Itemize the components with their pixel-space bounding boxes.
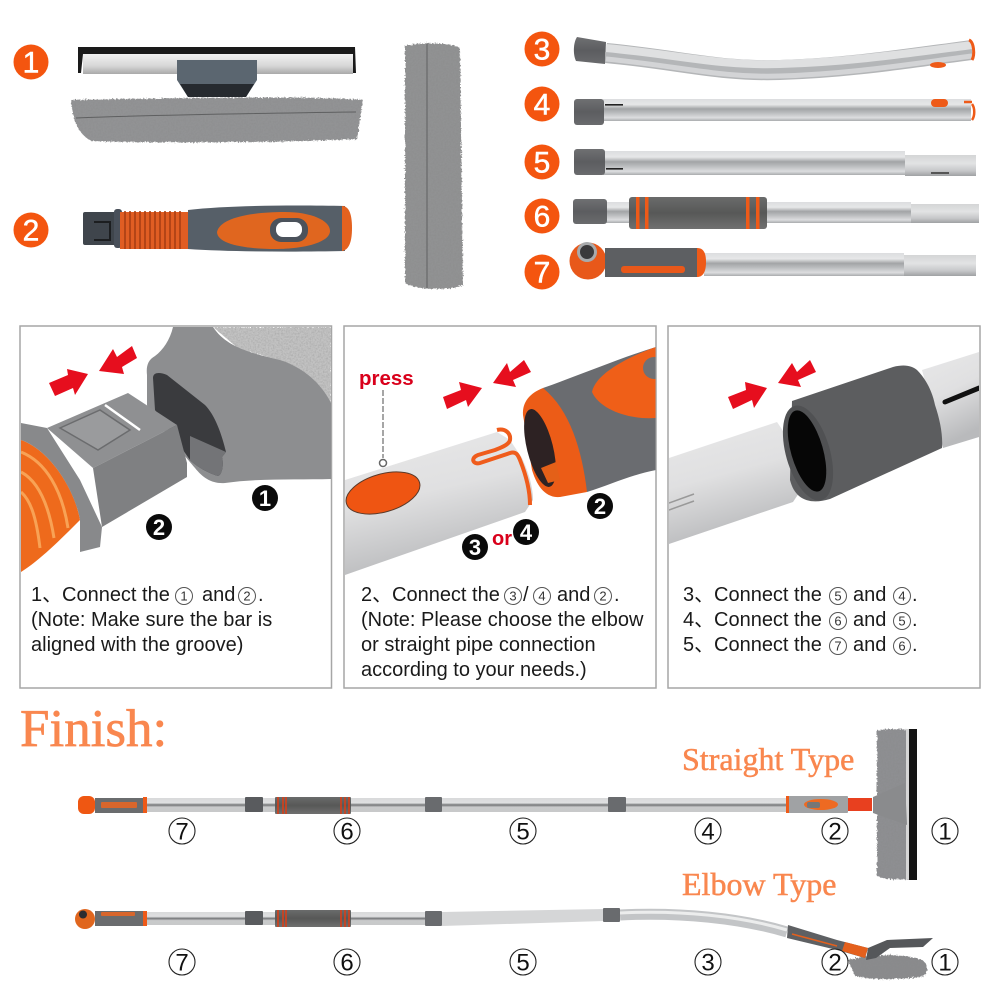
instructions steps 3 to 5: 6 (898, 638, 906, 654)
head: straight (786, 729, 917, 880)
number labels row: 5 (516, 950, 530, 976)
marker 2: 2 (594, 494, 606, 519)
panel: step 1 (20, 326, 332, 688)
photo: tube with press button (341, 430, 533, 575)
number labels row: 1 (938, 818, 952, 846)
badge 3: 3 (534, 34, 550, 66)
photo: handle socket (518, 347, 665, 497)
badge 5: 5 (534, 146, 550, 180)
photo: tube ends and sleeve (669, 352, 979, 544)
instructions steps 3 to 5: 5 (834, 588, 842, 604)
instructions step 2: 3 (509, 588, 517, 604)
photo: socket of squeegee head (147, 327, 331, 483)
part 6: foam grip tube (573, 197, 979, 229)
instructions step 1 (31, 584, 272, 656)
number labels row: 3 (701, 950, 715, 976)
press callout (359, 367, 414, 466)
badge 4 (524, 86, 560, 122)
instructions steps 3 to 5: and (853, 634, 886, 656)
number labels row: 2 (828, 818, 842, 846)
instructions steps 3 to 5: and (853, 584, 886, 606)
instructions step 1: (Note: Make sure the bar is (31, 609, 272, 631)
marker 3 or 4 (462, 519, 539, 560)
instructions step 2 (361, 584, 644, 681)
badge 1 (14, 44, 48, 80)
instructions step 1: . (258, 584, 264, 606)
photo: handle connector (21, 393, 187, 572)
instructions steps 3 to 5: . (912, 609, 918, 631)
part 3: curved tube (574, 37, 974, 76)
red arrows (728, 360, 816, 409)
instructions steps 3 to 5: Connect the (714, 634, 822, 656)
instructions steps 3 to 5: . (912, 584, 918, 606)
instructions step 1: 1、 (31, 584, 62, 606)
marker 3 or 4: or (492, 528, 512, 550)
badge 7: 7 (534, 256, 550, 290)
instructions steps 3 to 5: 5 (898, 614, 906, 628)
part 1: microfiber pad (71, 98, 363, 142)
instructions steps 3 to 5: Connect the (714, 609, 822, 631)
instructions steps 3 to 5: 5、 (683, 634, 714, 656)
instructions steps 3 to 5: 6 (834, 614, 842, 628)
panel: step 3 (668, 326, 980, 688)
marker 3 or 4: 3 (469, 535, 481, 560)
instructions steps 3 to 5: . (912, 634, 918, 656)
marker 2 (146, 514, 172, 540)
badge 6: 6 (534, 200, 550, 234)
instructions step 1: 1 (180, 588, 188, 604)
badge 4: 4 (534, 88, 550, 122)
instructions steps 3 to 5: 4、 (683, 609, 714, 631)
badge 2: 2 (23, 214, 39, 248)
instructions step 2: / (523, 584, 529, 606)
instructions step 2: and (557, 584, 590, 606)
marker 2 (587, 493, 613, 519)
instructions step 2: . (614, 584, 620, 606)
label: Elbow Type: Elbow Type (682, 866, 836, 902)
instructions step 2: according to your needs.) (361, 659, 587, 681)
instructions step 1: aligned with the groove) (31, 634, 243, 656)
instructions step 2: Connect the (392, 584, 500, 606)
instructions step 1: and (202, 584, 235, 606)
badge 3 (524, 32, 560, 66)
marker 1: 1 (259, 486, 271, 511)
number labels row: 7 (175, 950, 189, 976)
number labels row (169, 818, 958, 846)
label: Straight Type: Straight Type (682, 741, 854, 777)
elbow type assembly (75, 866, 958, 979)
instructions steps 3 to 5: and (853, 609, 886, 631)
instructions step 2: 2 (599, 588, 607, 604)
heading: Finish: Finish: (20, 700, 167, 758)
parts overview: pole sections (524, 32, 979, 290)
pole: straight (78, 796, 787, 814)
red arrows (49, 346, 137, 396)
number labels row: 4 (701, 818, 715, 846)
marker 2: 2 (153, 515, 165, 540)
straight type assembly (78, 729, 958, 880)
instructions step 1: 2 (243, 588, 251, 604)
number labels row: 5 (516, 818, 530, 846)
head: elbow (787, 925, 933, 979)
instructions steps 3 to 5 (683, 584, 918, 656)
part 7: top handle tube (570, 242, 976, 280)
number labels row: 6 (340, 950, 354, 976)
badge 1: 1 (23, 46, 39, 80)
badge 6 (524, 198, 560, 234)
part 4: straight tube (574, 99, 974, 125)
instructions steps 3 to 5: 7 (834, 638, 842, 654)
badge 7 (524, 254, 560, 290)
instructions step 2: 4 (538, 588, 546, 604)
number labels row: 6 (340, 818, 354, 846)
panel: step 2 (341, 326, 665, 688)
badge 5 (524, 144, 560, 180)
marker 1 (252, 485, 278, 511)
number labels row (169, 949, 958, 976)
number labels row: 2 (828, 950, 842, 976)
instructions step 1: Connect the (62, 584, 170, 606)
instructions step 2: or straight pipe connection (361, 634, 596, 656)
instructions steps 3 to 5: Connect the (714, 584, 822, 606)
part 2: handle (83, 205, 352, 252)
instructions step 2: (Note: Please choose the elbow (361, 609, 644, 631)
marker 3 or 4: 4 (520, 520, 533, 545)
number labels row: 1 (938, 950, 952, 976)
parts overview: head and handle (14, 43, 463, 289)
badge 2 (14, 212, 48, 248)
red arrows (443, 360, 531, 409)
pole: elbow (75, 908, 787, 932)
number labels row: 7 (175, 818, 189, 846)
instructions steps 3 to 5: 4 (898, 588, 906, 604)
part 5: straight tube (574, 149, 976, 176)
part 1: microfiber pad, vertical (405, 43, 463, 289)
instructions steps 3 to 5: 3、 (683, 584, 714, 606)
press callout: press (359, 367, 414, 390)
instructions step 2: 2、 (361, 584, 392, 606)
part 1: squeegee blade (78, 47, 356, 97)
